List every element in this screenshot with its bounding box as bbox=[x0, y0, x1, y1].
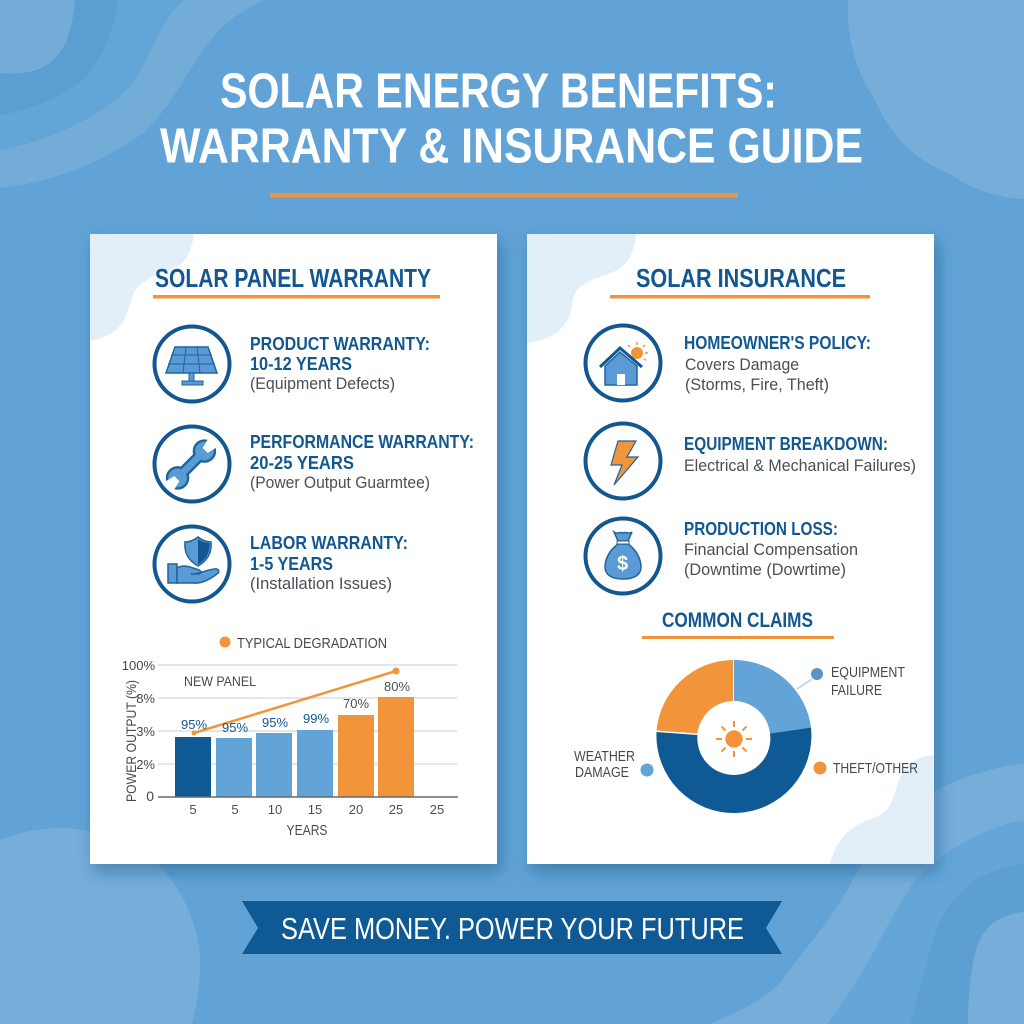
title underline bbox=[270, 193, 738, 198]
text: production loss bbox=[684, 519, 858, 579]
text: product warranty bbox=[250, 334, 430, 393]
title: SOLAR ENERGY BENEFITS: bbox=[220, 64, 777, 118]
text: performance warranty: 20-25 YEARS bbox=[250, 453, 354, 473]
degradation line bbox=[192, 668, 400, 736]
x axis labels: 20 bbox=[349, 802, 363, 817]
y axis labels: 2% bbox=[136, 757, 155, 772]
y axis labels: 100% bbox=[122, 658, 155, 673]
y axis labels: 3% bbox=[136, 724, 155, 739]
text: performance warranty bbox=[250, 432, 474, 492]
text: homeowner's policy: Covers Damage bbox=[685, 355, 799, 374]
chart legend: TYPICAL DEGRADATION bbox=[237, 635, 387, 652]
y axis labels bbox=[122, 658, 155, 804]
label: weather damage: DAMAGE bbox=[575, 764, 629, 781]
y axis labels: 8% bbox=[136, 691, 155, 706]
bar value labels: 95% bbox=[222, 720, 248, 735]
text: equipment breakdown: Electrical & Mechanical Failures) bbox=[684, 456, 916, 475]
banner: SAVE MONEY. POWER YOUR FUTURE bbox=[281, 911, 744, 946]
title: WARRANTY & INSURANCE GUIDE bbox=[160, 120, 863, 174]
heading: solar insurance: SOLAR INSURANCE bbox=[636, 265, 846, 293]
icon: house and sun bbox=[586, 326, 660, 400]
new panel label: NEW PANEL bbox=[184, 673, 256, 689]
text: performance warranty: (Power Output Guarmtee) bbox=[250, 473, 430, 492]
panel: solar insurance bbox=[527, 234, 934, 864]
x axis labels: 25 bbox=[389, 802, 403, 817]
text: product warranty: 10-12 YEARS bbox=[250, 354, 352, 374]
heading: common claims bbox=[642, 609, 834, 639]
x axis labels: 25 bbox=[430, 802, 444, 817]
icon: shield and hand bbox=[154, 526, 230, 602]
x axis labels: 5 bbox=[189, 802, 197, 817]
heading: common claims: COMMON CLAIMS bbox=[662, 609, 813, 632]
bars bbox=[175, 697, 414, 797]
text: labor warranty: (Installation Issues) bbox=[250, 574, 392, 593]
text: equipment breakdown bbox=[684, 434, 916, 475]
label: equipment failure: EQUIPMENT bbox=[831, 664, 905, 681]
icon: money bag: $ bbox=[617, 553, 628, 575]
bar value labels: 95% bbox=[262, 715, 288, 730]
panel: solar panel warranty bbox=[90, 234, 497, 864]
bar value labels: 80% bbox=[384, 679, 410, 694]
icon: solar panel bbox=[154, 326, 230, 402]
label: theft/other: THEFT/OTHER bbox=[833, 760, 918, 777]
icon: sun bbox=[716, 721, 752, 757]
heading: solar panel warranty: SOLAR PANEL WARRANTY bbox=[155, 265, 431, 293]
text: performance warranty: PERFORMANCE WARRANTY: bbox=[250, 432, 474, 452]
text: labor warranty: LABOR WARRANTY: bbox=[250, 533, 408, 553]
banner bbox=[242, 901, 782, 954]
x axis labels: 5 bbox=[231, 802, 239, 817]
text: labor warranty: 1-5 YEARS bbox=[250, 554, 333, 574]
text: equipment breakdown: EQUIPMENT BREAKDOWN: bbox=[684, 434, 888, 454]
text: product warranty: (Equipment Defects) bbox=[250, 374, 395, 393]
y axis labels: 0 bbox=[146, 788, 154, 804]
label: equipment failure: FAILURE bbox=[831, 682, 882, 699]
bar value labels: 99% bbox=[303, 711, 329, 726]
bar value labels: 95% bbox=[181, 717, 207, 732]
donut chart: common claims bbox=[656, 660, 811, 813]
text: labor warranty bbox=[250, 533, 408, 593]
y axis labels: POWER OUTPUT (%) bbox=[123, 680, 139, 802]
label: equipment failure bbox=[797, 664, 905, 699]
x axis labels: YEARS bbox=[286, 823, 328, 839]
text: homeowner's policy bbox=[684, 333, 871, 394]
text: production loss: Financial Compensation bbox=[684, 540, 858, 559]
x axis labels: 10 bbox=[268, 802, 282, 817]
icon: money bag bbox=[586, 518, 660, 594]
bar chart: typical degradation bbox=[122, 635, 458, 839]
title bbox=[160, 64, 863, 174]
text: homeowner's policy: HOMEOWNER'S POLICY: bbox=[684, 333, 871, 353]
text: homeowner's policy: (Storms, Fire, Theft) bbox=[685, 375, 829, 394]
bar value labels: 70% bbox=[343, 696, 369, 711]
text: production loss: (Downtime (Dowrtime) bbox=[684, 560, 846, 579]
label: weather damage bbox=[574, 748, 654, 781]
text: production loss: PRODUCTION LOSS: bbox=[684, 519, 838, 539]
icon: lightning bolt bbox=[586, 424, 660, 498]
icon: wrench bbox=[154, 426, 230, 502]
bar value labels bbox=[181, 679, 410, 735]
x axis labels: 15 bbox=[308, 802, 322, 817]
x axis labels bbox=[189, 802, 444, 839]
label: weather damage: WEATHER bbox=[574, 748, 635, 765]
text: product warranty: PRODUCT WARRANTY: bbox=[250, 334, 430, 354]
label: theft/other bbox=[814, 760, 918, 777]
